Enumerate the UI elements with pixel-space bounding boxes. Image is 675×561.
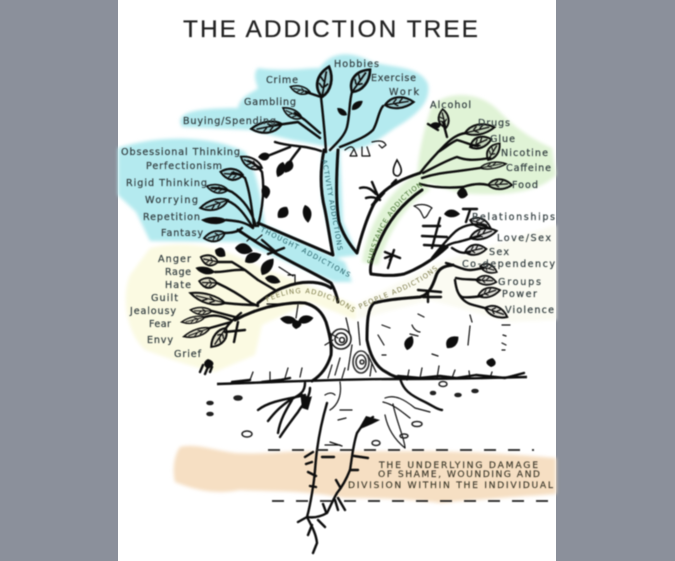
substance labels: Drugs bbox=[478, 118, 510, 129]
wash: underlying damage bbox=[174, 446, 556, 503]
substance labels: Food bbox=[512, 180, 538, 191]
thought labels: Rigid Thinking bbox=[126, 178, 207, 189]
people labels: Power bbox=[502, 289, 537, 300]
feeling labels: Hate bbox=[165, 280, 191, 291]
wash: feeling addictions bbox=[126, 244, 356, 372]
soil stones bbox=[207, 382, 478, 446]
activity labels: Exercise bbox=[371, 73, 416, 84]
title: THE ADDICTION TREE bbox=[183, 16, 478, 43]
wash: thought addictions bbox=[118, 139, 352, 282]
band label: thought addictions: THOUGHT ADDICTIONS bbox=[261, 226, 351, 278]
feeling labels: Anger bbox=[158, 254, 191, 265]
icon: rose knot right bbox=[353, 351, 369, 373]
band labels bbox=[261, 159, 438, 312]
people labels: Violence bbox=[505, 305, 554, 316]
thought labels: Perfectionism bbox=[146, 161, 222, 172]
feeling labels: Jealousy bbox=[129, 306, 176, 317]
people branches and leaves bbox=[385, 205, 510, 368]
leaf labels bbox=[121, 59, 555, 491]
feeling labels: Grief bbox=[174, 349, 202, 360]
band label: people addictions: PEOPLE ADDICTIONS bbox=[358, 265, 438, 310]
feeling branches and leaves bbox=[181, 242, 314, 374]
feeling labels: Fear bbox=[149, 319, 171, 330]
ground line with grass bbox=[217, 366, 527, 384]
people labels: Co-dependency bbox=[462, 259, 555, 270]
activity branches and leaves bbox=[250, 65, 414, 175]
activity labels: Crime bbox=[266, 75, 298, 86]
tree illustration bbox=[181, 65, 548, 553]
people labels bbox=[462, 212, 555, 316]
thought labels: Obsessional Thinking bbox=[121, 147, 240, 158]
people labels: Love/Sex bbox=[497, 233, 551, 244]
dashed damage boundaries bbox=[268, 450, 548, 501]
thought labels: Repetition bbox=[143, 212, 200, 223]
people labels: Sex bbox=[489, 247, 509, 258]
white page panel bbox=[118, 0, 556, 561]
underlying damage caption bbox=[348, 460, 554, 491]
thought leaves bbox=[199, 153, 313, 244]
people labels: Relationships bbox=[472, 212, 555, 223]
feeling labels bbox=[129, 254, 202, 360]
wash: substance addictions bbox=[418, 95, 556, 194]
thought labels: Fantasy bbox=[161, 228, 203, 239]
band label: substance addiction: SUBSTANCE ADDICTION bbox=[366, 182, 422, 264]
thought labels: Worrying bbox=[145, 195, 198, 206]
roots bbox=[258, 378, 442, 553]
feeling leaves bbox=[181, 242, 314, 374]
icon: rose knot left bbox=[331, 329, 351, 349]
thought branches and leaves bbox=[199, 153, 313, 254]
substance labels bbox=[430, 100, 551, 191]
wash: activity addictions bbox=[180, 54, 429, 150]
trunk and main limbs bbox=[235, 150, 453, 381]
underlying damage caption: THE UNDERLYING DAMAGE bbox=[378, 460, 538, 471]
substance labels: Glue bbox=[490, 134, 515, 145]
people labels: Groups bbox=[498, 277, 541, 288]
substance labels: Nicotine bbox=[501, 148, 548, 159]
band label: activity addictions: ACTIVITY ADDICTIONS bbox=[320, 159, 344, 251]
activity labels: Buying/Spending bbox=[183, 116, 276, 127]
activity leaves bbox=[250, 65, 414, 175]
wash: substance band bbox=[362, 170, 430, 265]
substance leaves bbox=[360, 108, 512, 205]
underlying damage caption: OF SHAME, WOUNDING AND bbox=[378, 469, 540, 480]
substance labels: Alcohol bbox=[430, 100, 471, 111]
wash: activity band bbox=[322, 150, 358, 258]
band label: feeling addictions: FEELING ADDICTIONS bbox=[265, 288, 356, 312]
feeling labels: Rage bbox=[165, 267, 191, 278]
feeling labels: Guilt bbox=[151, 293, 178, 304]
substance labels: Caffeine bbox=[506, 163, 551, 174]
colour background washes bbox=[118, 54, 556, 503]
substance branches and leaves bbox=[360, 108, 512, 205]
activity labels bbox=[183, 59, 419, 127]
activity labels: Gambling bbox=[244, 97, 296, 108]
feeling labels: Envy bbox=[147, 335, 173, 346]
activity labels: Work bbox=[389, 87, 419, 98]
trunk texture and knots bbox=[325, 318, 390, 378]
activity labels: Hobbies bbox=[334, 59, 379, 70]
wash: people addictions bbox=[358, 225, 556, 322]
people leaves bbox=[385, 205, 510, 368]
thought labels bbox=[121, 147, 240, 239]
underlying damage caption: DIVISION WITHIN THE INDIVIDUAL bbox=[348, 480, 554, 491]
